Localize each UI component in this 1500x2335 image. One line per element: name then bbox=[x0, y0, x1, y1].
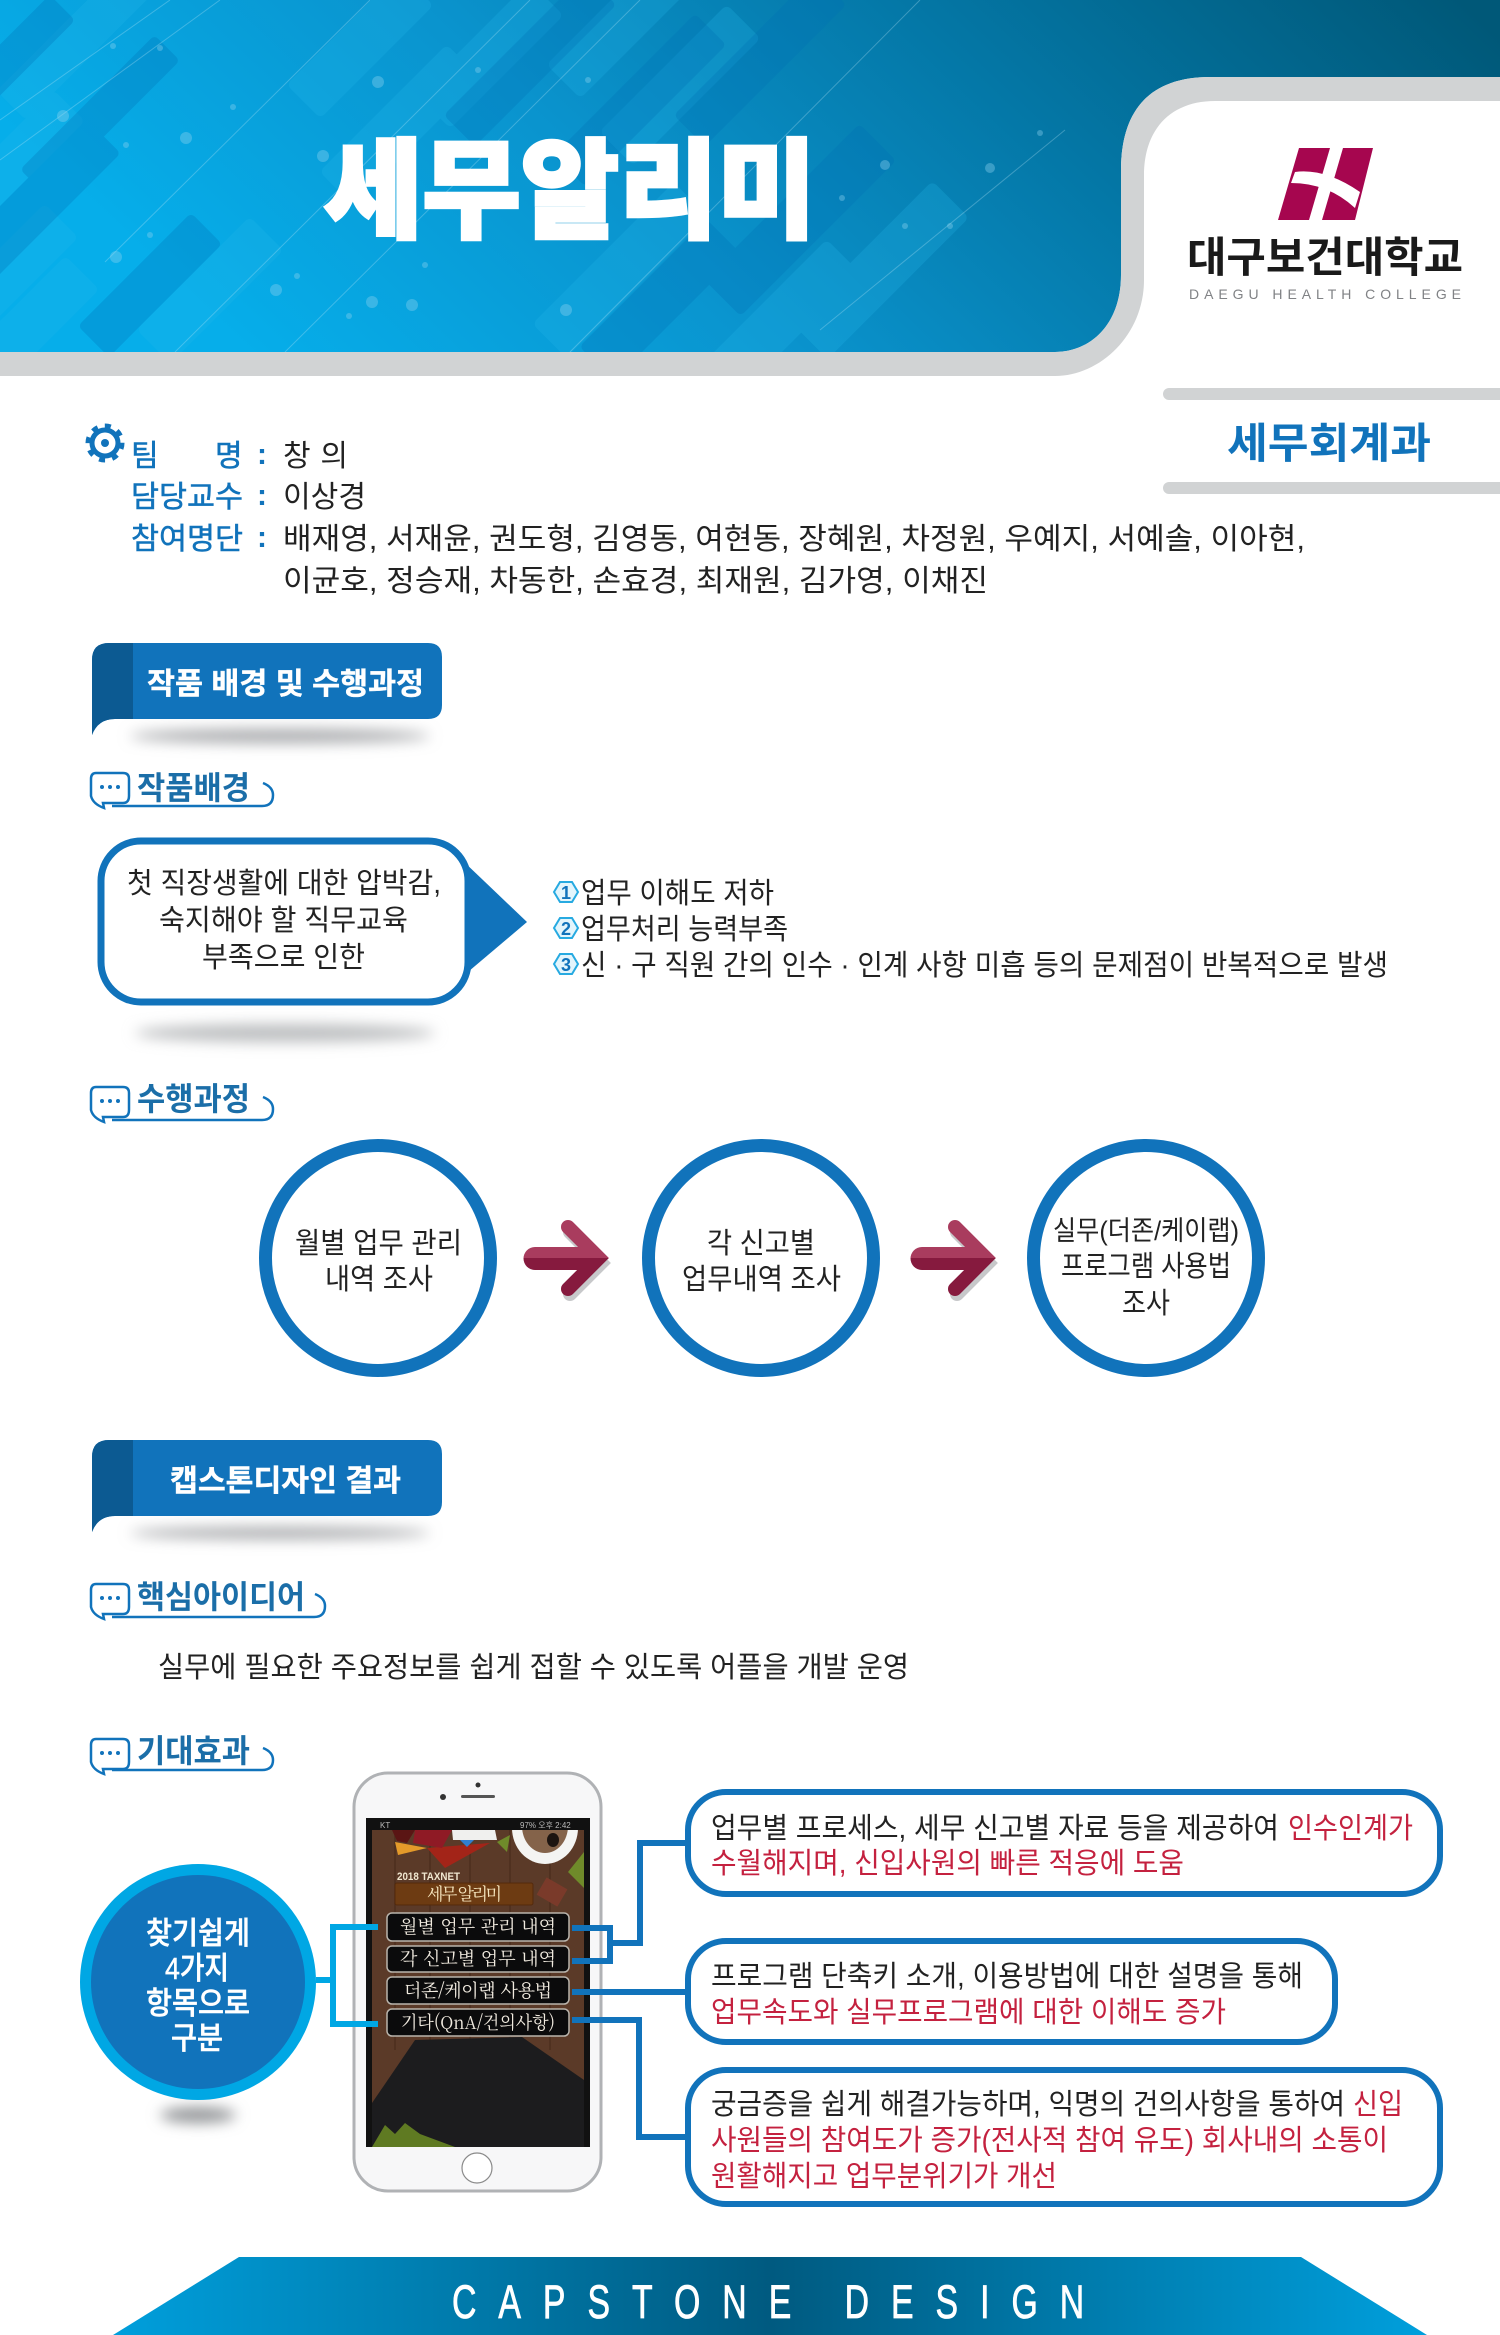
college logo bbox=[1187, 148, 1463, 302]
phone mockup bbox=[354, 1773, 601, 2191]
row: advisor bbox=[131, 479, 366, 514]
subheading: 수행과정: 수행과정 bbox=[137, 1081, 250, 1117]
effect box 3: 사원들의 참여도가 증가(전사적 참여 유도) 회사내의 소통이 bbox=[711, 2124, 1388, 2157]
item 2: 2 bbox=[561, 919, 571, 939]
callout: pressure box bbox=[101, 841, 527, 1042]
phone screen: 세무 알리미 bbox=[427, 1880, 502, 1905]
header banner bbox=[0, 0, 1500, 401]
callout: pressure box: 첫 직장생활에 대한 압박감, bbox=[127, 867, 441, 900]
logo english name: DAEGU HEALTH COLLEGE bbox=[1189, 286, 1461, 302]
item 3: 신 · 구 직원 간의 인수 · 인계 사항 미흡 등의 문제점이 반복적으로 발생 bbox=[581, 949, 1388, 982]
row: participants bbox=[131, 521, 1305, 598]
row: participants: : bbox=[257, 521, 267, 554]
row: team name: 팀 bbox=[131, 440, 159, 473]
phone screen: 더존/케이랩 사용법 bbox=[404, 1977, 552, 2003]
step 1 circle bbox=[266, 1146, 490, 1370]
phone screen: 월별 업무 관리 내역 bbox=[400, 1913, 556, 1939]
footer banner bbox=[113, 2257, 1427, 2335]
status bar text: KT bbox=[380, 1821, 390, 1830]
logo wordmark: 대구보건대학교 bbox=[1187, 234, 1463, 281]
footer banner: CAPSTONE DESIGN bbox=[452, 2276, 1084, 2328]
row: participants: 배재영, 서재윤, 권도형, 김영동, 여현동, 장혜원, 차정원, 우예지, 서예솔, 이아현, bbox=[283, 523, 1305, 556]
row: advisor: : bbox=[257, 479, 267, 512]
callout: pressure box: 부족으로 인한 bbox=[202, 942, 365, 974]
phone body bbox=[354, 1773, 601, 2191]
row: team name: 창 의 bbox=[283, 440, 348, 473]
step 3 circle: 실무(더존/케이랩) bbox=[1053, 1216, 1239, 1246]
section heading: capstone result bbox=[92, 1440, 442, 1539]
callout: pressure box: 숙지해야 할 직무교육 bbox=[159, 904, 408, 937]
row: team name: 명 bbox=[215, 440, 243, 473]
subheading: 핵심아이디어: 핵심아이디어 bbox=[137, 1579, 305, 1615]
step 1 circle: 월별 업무 관리 bbox=[295, 1227, 462, 1260]
effect box 1: 수월해지며, 신입사원의 빠른 적응에 도움 bbox=[711, 1847, 1184, 1880]
arrow 2 bbox=[922, 1227, 988, 1294]
icon: gear bbox=[88, 426, 122, 460]
connector: menu to effect 1 bbox=[572, 1843, 686, 1961]
app menu buttons bbox=[387, 1913, 569, 2036]
row: advisor: 이상경 bbox=[283, 481, 366, 514]
effect box 2: 업무속도와 실무프로그램에 대한 이해도 증가 bbox=[711, 1996, 1226, 2029]
item 2: 업무처리 능력부족 bbox=[581, 913, 788, 946]
effect box 2 bbox=[688, 1941, 1335, 2042]
team info bbox=[131, 438, 1305, 598]
subheading: 작품배경 bbox=[91, 770, 273, 808]
row: participants: 이균호, 정승재, 차동한, 손효경, 최재원, 김가영, 이채진 bbox=[283, 565, 988, 598]
header grey frame bbox=[0, 77, 1500, 376]
app title: 2018 TAXNET bbox=[397, 1871, 460, 1883]
effect box 3: 궁금증을 쉽게 해결가능하며, 익명의 건의사항을 통하여 bbox=[711, 2088, 1345, 2121]
main point circle: 4가지 bbox=[165, 1951, 229, 1986]
item 3: 3 bbox=[561, 955, 571, 975]
step 3 circle bbox=[1034, 1146, 1258, 1370]
row: team name: : bbox=[257, 438, 267, 471]
section heading: capstone result: 캡스톤디자인 결과 bbox=[170, 1465, 401, 1498]
subheading: 작품배경: 작품배경 bbox=[137, 770, 250, 806]
row: participants: 참여명단 bbox=[131, 523, 243, 556]
connector: menu to effect 3 bbox=[572, 2020, 686, 2137]
subheading: 기대효과 bbox=[91, 1733, 273, 1774]
main point circle bbox=[80, 1864, 316, 2123]
phone screen: 97% 오후 2:42 bbox=[520, 1821, 571, 1830]
step 2 circle bbox=[648, 1146, 874, 1370]
effect box 1 bbox=[688, 1792, 1440, 1894]
subheading: 수행과정 bbox=[91, 1081, 273, 1122]
section heading: background and process: 작품 배경 및 수행과정 bbox=[147, 668, 424, 701]
connector: circle to menu bbox=[316, 1927, 378, 2024]
core idea text: 실무에 필요한 주요정보를 쉽게 접할 수 있도록 어플을 개발 운영 bbox=[158, 1651, 909, 1684]
main point circle: 구분 bbox=[171, 2021, 223, 2056]
section heading: background and process bbox=[92, 643, 442, 743]
row: team name bbox=[131, 438, 348, 473]
effect box 3: 원활해지고 업무분위기가 개선 bbox=[711, 2160, 1057, 2193]
phone screen: 기타(QnA/건의사항) bbox=[401, 2009, 555, 2035]
step 2 circle: 각 신고별 bbox=[707, 1228, 815, 1260]
effect box 2: 프로그램 단축키 소개, 이용방법에 대한 설명을 통해 bbox=[711, 1960, 1303, 1993]
phone screen bbox=[366, 1792, 590, 2147]
main point circle: 찾기쉽게 bbox=[146, 1916, 250, 1951]
subheading: 핵심아이디어 bbox=[91, 1579, 325, 1619]
arrow 1 bbox=[535, 1227, 601, 1294]
item 1: 업무 이해도 저하 bbox=[581, 877, 774, 910]
effect box 1: 업무별 프로세스, 세무 신고별 자료 등을 제공하여 bbox=[711, 1812, 1279, 1845]
step 1 circle: 내역 조사 bbox=[325, 1264, 433, 1296]
department tag bbox=[1163, 388, 1500, 494]
main point circle: 항목으로 bbox=[146, 1986, 250, 2021]
effect box 1: 인수인계가 bbox=[1288, 1813, 1413, 1845]
logo mark bbox=[1278, 148, 1373, 220]
phone screen: 각 신고별 업무 내역 bbox=[400, 1945, 556, 1971]
row: advisor: 담당교수 bbox=[131, 481, 243, 514]
step 3 circle: 프로그램 사용법 bbox=[1061, 1251, 1231, 1283]
problem list bbox=[554, 877, 1388, 982]
subheading: 기대효과: 기대효과 bbox=[137, 1733, 250, 1769]
effect box 3: 신입 bbox=[1353, 2088, 1403, 2121]
step 3 circle: 조사 bbox=[1122, 1288, 1170, 1320]
item 1: 1 bbox=[561, 883, 571, 903]
title: 세무알리미 bbox=[324, 131, 816, 252]
department tag: 세무회계과 bbox=[1227, 420, 1431, 467]
effect box 3 bbox=[688, 2070, 1440, 2204]
connector: menu to effect 2 bbox=[572, 1989, 686, 1995]
step 2 circle: 업무내역 조사 bbox=[682, 1263, 841, 1296]
